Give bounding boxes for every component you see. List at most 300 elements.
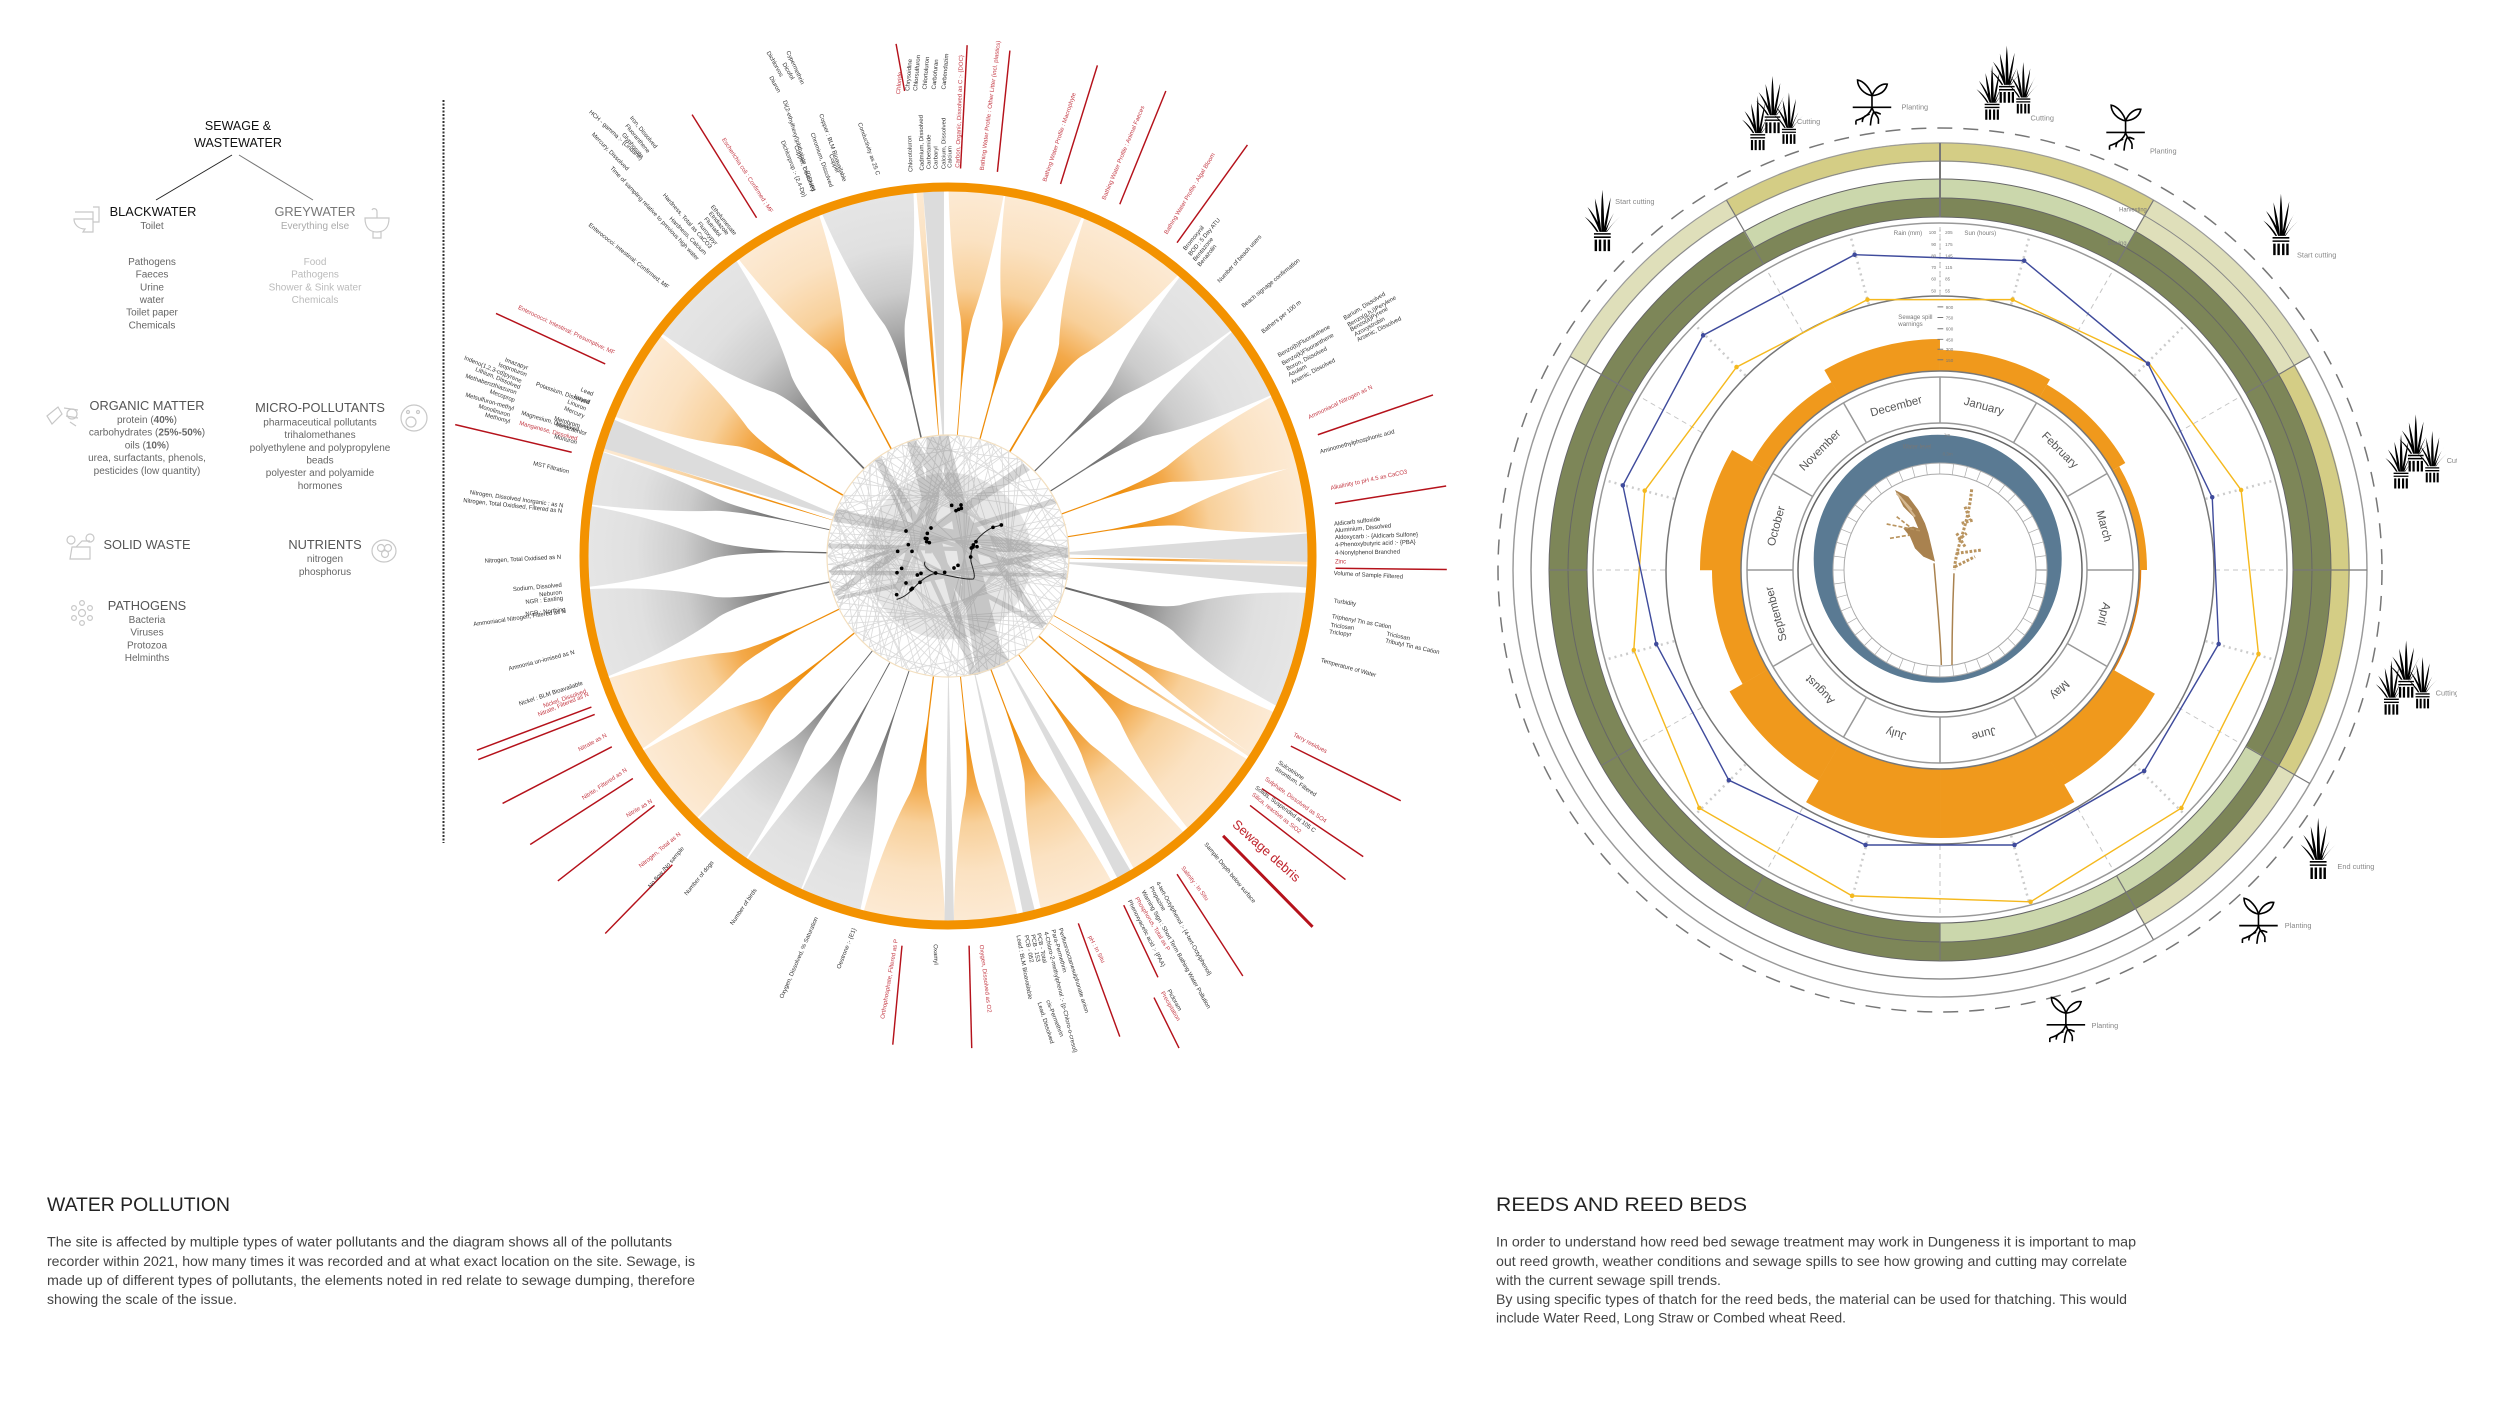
pollutant labels: Lithium, Dissolved: [474, 367, 521, 391]
rain line blue: [1621, 252, 2221, 847]
pollutant labels: Alkalinity to pH 4.5 as CaCO3: [1330, 469, 1409, 492]
micro-pollutants text: hormones: [298, 481, 342, 492]
pollutant labels: Metsulfuron-methyl: [465, 392, 514, 412]
greywater text: GREYWATER: [274, 204, 356, 219]
pollutant labels: Solids, Suspended at 105 C: [1254, 785, 1317, 835]
calendar action labels: Planting: [1902, 102, 1928, 111]
pollutant labels: Metobrom: [553, 416, 581, 430]
month labels: September: [1764, 585, 1790, 642]
pollutant labels: Chlorotoluron: [907, 135, 914, 172]
growing ring light green segments: [1419, 49, 2461, 1091]
pollutant labels: Glyphosate: [620, 132, 644, 160]
text block: water pollution: made up of different types of pollutants, the elements noted in red relate to sewage dumping, therefore: [47, 1272, 695, 1288]
calendar action labels: Planting: [2092, 1021, 2118, 1030]
pollutant labels: 4-Nonylphenol Branched: [1335, 550, 1400, 557]
pollutant labels: Calcium, Dissolved: [941, 118, 947, 169]
pollutant labels: Volume of Sample Filtered: [1334, 571, 1403, 581]
pollutant labels: Sample Depth below surface: [1203, 842, 1257, 905]
pollutant labels: Ammonia un-ionised as N: [508, 650, 575, 673]
pollutant labels: PCB - 153: [1029, 934, 1041, 963]
fans of recorded pollutants: [576, 178, 1321, 935]
pollutant labels: Bathers per 100 m: [1261, 300, 1303, 335]
pollutant labels: Chrysoidine: [905, 58, 914, 91]
chart: reed calendar radial diagram: [1369, 0, 2500, 1141]
axis labels: Rain (mm): [1894, 230, 1922, 237]
pollutant labels: Orthophosphate, Filtered as P: [880, 939, 900, 1019]
heading: sewage and wastewater: SEWAGE &: [205, 119, 272, 133]
axis labels: Sun (hours): [1964, 230, 1996, 237]
pollutant labels: Carbendazim: [941, 53, 950, 90]
pollutant labels: Number of beach users: [1217, 234, 1263, 284]
pollutant labels: Potassium, Dissolved: [535, 382, 590, 406]
pollutant labels: Arsenic, Dissolved: [1290, 358, 1336, 386]
pollutant labels: Calcium: [947, 146, 953, 168]
pollutant labels: Propazine: [1148, 886, 1166, 913]
axis labels: 50: [1931, 288, 1937, 293]
pollutant labels: Aluminium, Dissolved: [1335, 523, 1391, 534]
pollutant labels: Isoproturon: [497, 362, 527, 378]
pollutant labels: Nitrogen, Dissolved Inorganic : as N: [469, 490, 564, 510]
red sewage indicator lines: [455, 44, 1447, 1048]
pollutant labels: Nitrate as N: [578, 733, 608, 753]
dotted divider: [442, 100, 444, 843]
axis labels: 175: [1945, 242, 1953, 247]
pollutant labels: Benzo(b)Fluoranthene: [1277, 324, 1332, 359]
heading: sewage and wastewater: WASTEWATER: [194, 136, 282, 150]
text block: water pollution: showing the scale of the issue.: [47, 1291, 237, 1307]
greywater text: [269, 204, 362, 306]
pollutant labels: Copper : BLM Bioavailable: [817, 113, 847, 183]
pollutant labels: Copper: [827, 154, 840, 174]
pollutant labels: NGR : Northing: [525, 607, 566, 618]
calendar action labels: Cutting: [1797, 117, 1820, 126]
micro-pollutants text: MICRO-POLLUTANTS: [255, 400, 385, 415]
pollutant labels: Neburon: [539, 590, 562, 599]
pollutant labels: Arsenic, Dissolved: [1356, 316, 1403, 344]
month labels: May: [2047, 678, 2071, 702]
greywater text: Chemicals: [292, 295, 338, 306]
icon: pathogens: [72, 601, 92, 625]
calendar action labels: Cutting: [2436, 688, 2459, 698]
pollutant labels: Dichlorprop :- {2,4-Dp}: [779, 140, 807, 198]
axis labels: 750: [1946, 315, 1954, 320]
month labels: April: [2094, 601, 2112, 626]
organic matter text: pesticides (low quantity): [94, 466, 200, 477]
pollutant labels: Di(2-ethylhexyl)phthalate :- {DEHP}: [781, 100, 815, 192]
pollutant labels: Monolinuron: [478, 404, 511, 419]
pollutant labels: Oxygen, Dissolved as O2: [978, 944, 992, 1014]
blackwater text: Toilet: [140, 221, 164, 232]
pollutant labels: Aldoxycarb :- {Aldicarb Sulfone}: [1335, 532, 1418, 541]
pollutant labels: Nickel : BLM Bioavailable: [518, 681, 584, 708]
pollutant labels: 4-tert-Octylphenol :- {4-tert-Octylphenol}: [1154, 881, 1212, 977]
pollutant labels: Warning Sign : Short Term Bathing Water Pollution: [1140, 890, 1211, 1010]
calendar action labels: Planting: [2150, 146, 2177, 156]
micro-pollutants text: polyethylene and polypropylene: [250, 443, 391, 454]
pollutant labels: Triclopyr: [1329, 630, 1352, 638]
text block: water pollution: [47, 1195, 695, 1307]
month labels: July: [1885, 725, 1908, 742]
month labels: August: [1803, 672, 1837, 706]
pollutant labels: Chlortoluron: [922, 56, 931, 90]
nutrients text: phosphorus: [299, 567, 351, 578]
orange fans: sewage related: [593, 179, 1319, 935]
calendar action labels: Cutting: [2031, 113, 2054, 123]
calendar action labels: Start cutting: [1615, 197, 1655, 206]
pollutant labels: Mercury, Dissolved: [590, 132, 629, 172]
month labels: November: [1797, 427, 1844, 474]
pollutant labels: Turbidity: [1333, 599, 1356, 608]
pollutant labels: Chromium, Dissolved: [809, 132, 833, 188]
pollutant labels: Salinity : In Situ: [1179, 866, 1209, 902]
pollutant labels: Lead: [579, 387, 594, 398]
axis labels: 150: [1946, 358, 1954, 363]
pollutant labels: Nitrite, Filtered as N: [581, 768, 628, 802]
pollutant labels: Tarry residues: [1292, 732, 1328, 755]
month boundary guides: [1595, 225, 2285, 915]
pollutant labels: Temperature of Water: [1320, 658, 1377, 679]
pollutant labels: Bathing Water Profile : Algal Bloom: [1164, 152, 1217, 236]
panel: sewage and wastewater key: [47, 119, 427, 664]
blackwater text: Urine: [140, 282, 164, 294]
chart: water pollutant radial diagram: [455, 40, 1447, 1053]
month boundaries on rings: [1549, 143, 2367, 961]
icon: organic matter: [47, 407, 78, 426]
pathogens text: Protozoa: [127, 640, 167, 652]
pollutant labels: Mecoprop: [489, 389, 516, 404]
axis labels: 55: [1945, 288, 1951, 293]
heading: sewage and wastewater: [194, 119, 282, 150]
pollutant labels: Hardness, Calcium: [668, 216, 707, 257]
axis labels: 90: [1931, 242, 1937, 247]
pollutant labels: Benzo(a)Pyrene: [1349, 306, 1390, 333]
pollutant labels: Metazachlor: [555, 422, 587, 438]
pollutant labels: Flutriafol: [702, 216, 722, 238]
pollutant labels: Imazapyr: [504, 357, 529, 372]
month labels: March: [2093, 509, 2113, 543]
axis labels: Water level: [1903, 444, 1931, 450]
pollutant labels: Escherichia coli : Confirmed ; MF: [720, 137, 774, 215]
blackwater text: [110, 204, 196, 332]
pollutant labels: Enterococci: Intestinal; Presumptive; MF: [517, 305, 616, 356]
pollutant labels: Copper, Dissolved: [792, 145, 816, 193]
icon: solid waste: [67, 534, 94, 559]
pollutant labels: Number of birds: [730, 888, 759, 927]
centre scale axis: [1939, 230, 1942, 296]
pollutant labels: Carbaryl: [934, 146, 939, 169]
month labels: February: [2039, 430, 2080, 471]
pollutant labels: Enterococci: Intestinal; Confirmed; MF: [587, 223, 670, 291]
pollutant labels: Nitrite as N: [626, 799, 654, 819]
pollutant labels: No flow /No sample: [648, 846, 686, 890]
pollutant labels: Carbofuran: [932, 59, 940, 90]
pollutant labels: Nitrate, Filtered as N: [537, 692, 590, 718]
organic matter text: ORGANIC MATTER: [90, 398, 204, 413]
pollutant labels: Aminomethylphosphonic acid: [1319, 429, 1395, 456]
pathogens text: [108, 598, 186, 664]
blackwater text: Pathogens: [128, 257, 176, 268]
pollutant labels: Azoxystrobin: [1353, 316, 1386, 338]
pollutant labels: Triclosan: [1330, 623, 1354, 632]
branch lines: [156, 155, 313, 200]
pathogens text: Viruses: [130, 628, 164, 638]
text block: reeds and reed beds: By using specific types of thatch for the reed beds, the material can be used for thatching. This would: [1496, 1291, 2127, 1307]
pollutant labels: Zinc: [1335, 559, 1346, 566]
pollutant labels: Benazolin: [1197, 244, 1218, 268]
pollutant labels: cis-Permethrin: [1044, 999, 1064, 1038]
micro-pollutants text: pharmaceutical pollutants: [263, 418, 377, 428]
pollutant labels: Triclosan: [1386, 632, 1410, 642]
calendar action labels: Cutting: [2447, 456, 2470, 465]
greywater text: Pathogens: [291, 270, 339, 280]
month labels: December: [1869, 394, 1924, 419]
pollutant labels: Linuron: [566, 399, 587, 413]
pollutant labels: Nitrogen, Total as N: [638, 832, 682, 870]
pollutant labels: Bathing Water Profile : Animal Faeces: [1102, 105, 1146, 201]
pollutant labels: Ethofumesate: [709, 204, 737, 237]
axis labels: [1894, 208, 2147, 457]
organic matter text: protein (40%): [117, 415, 177, 426]
pollutant labels: Sodium, Dissolved: [513, 583, 562, 593]
pollutant labels: Etridiazole: [707, 211, 730, 237]
growing ring dark green: [1568, 198, 2312, 942]
pollutant labels: HCH - gamma :- {Lindane}: [587, 110, 643, 162]
pollutant labels: Oestrone :- {E1}: [836, 927, 858, 970]
pollutant labels: pH : In Situ: [1086, 935, 1105, 964]
dashed outer ring: [1498, 128, 2382, 1012]
pollutant labels: Cypermethrin: [784, 50, 805, 86]
axis labels: 60: [1931, 276, 1937, 281]
pollutant labels: Hardness, Total as CaCO3: [661, 193, 713, 251]
blackwater text: BLACKWATER: [110, 204, 196, 219]
pollutant labels: MST Filtration: [532, 461, 569, 476]
outer guide rings: [1513, 143, 2367, 997]
pollutant labels: Time of sampling relative to previous high water: [608, 166, 699, 262]
axis labels: 205: [1945, 230, 1953, 235]
axis labels: 70: [1931, 265, 1937, 270]
pollutant labels: Bromoxynil: [1183, 225, 1206, 252]
pollutant labels: Picloram: [1165, 989, 1182, 1012]
pollutant labels: Oxygen, Dissolved, % Saturation: [779, 916, 820, 1000]
pollutant labels: Fluroxypyr: [696, 221, 718, 247]
reed illustration: [1887, 489, 1982, 665]
tick ring: [1833, 463, 2047, 677]
pollutant labels: Tributyl Tin as Cation: [1385, 638, 1440, 656]
micro-pollutants text: trihalomethanes: [284, 430, 356, 441]
pollutant labels: Number of dogs: [684, 860, 715, 897]
pollutant labels: Silica, reactive as SiO2: [1250, 792, 1302, 836]
pollutant labels: Precipitation: [1159, 991, 1181, 1022]
pollutant labels: Nitrogen, Total Oxidised as N: [485, 555, 561, 565]
axis labels: 450: [1946, 337, 1954, 342]
organic matter text: carbohydrates (25%-50%): [89, 428, 205, 438]
calendar action labels: [1615, 102, 2470, 1030]
pollutant labels: Barium, Dissolved: [1343, 292, 1387, 322]
blackwater text: Toilet paper: [126, 308, 179, 318]
pollutant labels: Chlorsulfuron: [913, 55, 922, 91]
pollutant labels: Fluoranthene: [623, 123, 651, 155]
month centre guides: [1607, 237, 2273, 903]
calendar action labels: End cutting: [2337, 862, 2374, 871]
month labels: January: [1962, 396, 2005, 418]
pollutant labels: Sewage debris: [1230, 817, 1304, 885]
pollutant labels: Lead, Dissolved: [1036, 1002, 1054, 1045]
pollutant labels: Asulam: [1288, 364, 1308, 379]
pollutant labels: PCB - 052: [1022, 935, 1034, 964]
micro-pollutants text: beads: [306, 456, 334, 466]
text block: reeds and reed beds: REEDS AND REED BEDS: [1496, 1195, 1747, 1216]
calendar action labels: Start cutting: [2297, 250, 2336, 259]
central web of chords: [793, 399, 1105, 709]
ring edges: [1513, 143, 2367, 997]
text block: reeds and reed beds: In order to understand how reed bed sewage treatment may work in Dungeness it is important to map: [1496, 1234, 2136, 1250]
pollutant labels: Lead : BLM Bioavailable: [1015, 935, 1033, 1001]
month labels: June: [1970, 724, 1997, 742]
axis labels: Sowing: [2108, 241, 2127, 247]
blackwater text: water: [139, 295, 165, 306]
sun line yellow: [1632, 297, 2261, 904]
pollutant labels: Para-Permethrin: [1049, 929, 1067, 973]
pollutant labels: Nickel, Dissolved: [543, 689, 587, 710]
pollutant labels: 4-Chloro-2-methylphenol :- {p-Chloro-o-cresol}: [1042, 931, 1077, 1053]
pollutant labels: PCB - Total: [1035, 933, 1047, 964]
pollutant labels: Indeno(1,2,3-cd)pyrene: [463, 356, 523, 385]
text block: reeds and reed beds: [1495, 1195, 2136, 1326]
pollutant labels: Sulcotrione: [1277, 760, 1305, 782]
pollutant labels: Magnesium, Dissolved: [520, 411, 579, 433]
pollutant labels: Carbetamide: [926, 134, 932, 169]
pathogens text: Bacteria: [129, 615, 166, 626]
outer orange ring: [584, 187, 1312, 925]
nutrients text: [288, 537, 362, 578]
axis labels: 145: [1945, 253, 1953, 258]
organic matter text: [88, 398, 206, 477]
pollutant labels: Phosphorus, Total as P: [1133, 896, 1170, 952]
axis labels: 100: [1929, 230, 1937, 235]
pollutant labels: Beach signage confirmation: [1241, 258, 1301, 310]
axis labels: warnings: [1897, 321, 1923, 328]
greywater text: Food: [304, 257, 326, 268]
pollutant labels: Iron, Dissolved: [628, 115, 658, 150]
icons: planting: [1853, 80, 2278, 1043]
calendar action labels: Planting: [2285, 921, 2311, 930]
pollutant labels: Strontium, Filtered: [1273, 766, 1317, 798]
pollutant labels: Cadmium, Dissolved: [919, 115, 926, 171]
pollutant labels: Bathing Water Profile : Macrophyte: [1042, 91, 1078, 183]
pollutant labels: Chloride: [896, 71, 904, 95]
nutrients text: NUTRIENTS: [288, 537, 362, 552]
pollutant labels: Perfluorooctanesulphonate anion: [1057, 928, 1089, 1014]
pollutant labels: Monuron: [553, 434, 577, 446]
text block: water pollution: WATER POLLUTION: [47, 1195, 230, 1216]
text block: water pollution: recorder within 2021, how many times it was recorded and at what exact location on the site. Sewage, is: [47, 1253, 695, 1269]
text block: reeds and reed beds: with the current sewage spill trends.: [1495, 1272, 1721, 1288]
pollutant labels: Ammoniacal Nitrogen as N: [1308, 385, 1374, 421]
axis labels: 0.3m: [1943, 452, 1953, 457]
axis labels: Sewage spill: [1898, 314, 1932, 321]
month wheel: [1741, 371, 2139, 769]
month labels: October: [1766, 505, 1788, 548]
pollutant labels: Boron, Dissolved: [1286, 346, 1328, 373]
axis labels: 80: [1931, 253, 1937, 258]
pollutant labels: Mercury: [563, 406, 585, 420]
blackwater text: Faeces: [136, 270, 168, 280]
pollutant labels: Manganese, Dissolved: [519, 421, 578, 442]
icons: single bundle cutting: [1585, 190, 2336, 879]
axis labels: 115: [1945, 265, 1953, 270]
harvesting ring dark yellow segments: [1369, 0, 2500, 1141]
pollutant labels: Methabenzthiazuron: [464, 374, 517, 396]
pollutant labels: Benzo(g,h,i)Perylene: [1347, 295, 1398, 329]
icon: toilet: [74, 207, 99, 232]
text block: reeds and reed beds: out reed growth, weather conditions and sewage spills to see how growing and cutting may correlate: [1496, 1253, 2127, 1269]
axis labels: Harvesting: [2119, 208, 2147, 214]
blackwater text: Chemicals: [129, 320, 175, 332]
pollutant labels: [463, 40, 1440, 1053]
greywater text: Shower & Sink water: [269, 282, 362, 294]
weather ring bounds: [1593, 223, 2287, 917]
pollutant labels: Conductivity as 25 C: [856, 122, 880, 177]
pollutant labels: Methomyl: [484, 413, 511, 425]
inner ring: [827, 435, 1069, 677]
grey fans: other pollutants: [576, 178, 1321, 922]
sewage spill warnings bars: [1621, 251, 2259, 889]
pollutant labels: Oxamyl: [932, 944, 938, 965]
axis labels: 85: [1945, 276, 1951, 281]
pollutant labels: Ammoniacal Nitrogen, Filtered as N: [473, 609, 566, 628]
pollutant labels: 4-Phenoxybutyric acid :- {PBA}: [1335, 540, 1416, 549]
pollutant labels: Carbon, Organic, Dissolved as C :- {DOC}: [955, 55, 965, 168]
sewer line and sample points: [895, 503, 1003, 599]
greywater text: Everything else: [281, 221, 350, 232]
micro-pollutants text: polyester and polyamide: [266, 468, 375, 479]
nutrients text: nitrogen: [307, 554, 343, 565]
pollutant labels: Dicofol: [781, 62, 795, 81]
pollutant labels: Phenoxyacetic acid :- {PAA}: [1126, 899, 1166, 968]
pollutant labels: Sulphate, Dissolved as SO4: [1263, 777, 1328, 825]
micro-pollutants text: [250, 400, 391, 492]
right edge crop: [2457, 0, 2500, 1100]
pollutant labels: Diuron: [767, 76, 781, 94]
pollutant labels: Dichlorvos: [765, 51, 784, 78]
icon: nutrients: [372, 540, 396, 562]
text block: water pollution: The site is affected by multiple types of water pollutants and the diagram shows all of the pollutants: [47, 1234, 672, 1250]
organic matter text: urea, surfactants, phenols,: [88, 453, 206, 464]
organic matter text: oils (10%): [125, 440, 169, 452]
icon: micro-pollutants: [401, 405, 427, 431]
pollutant labels: Bentazone: [1192, 236, 1216, 263]
rain and sun lines: [1585, 46, 2470, 1043]
grey strips: [594, 180, 1319, 932]
pollutant labels: Aldicarb sulfoxide: [1334, 517, 1381, 528]
axis labels: 1m: [1944, 432, 1950, 437]
axis labels: 600: [1946, 327, 1954, 332]
axis labels: 900: [1946, 305, 1954, 310]
pathogens text: Helminths: [125, 653, 169, 664]
pollutant labels: Nitrogen, Total Oxidised, Filtered as N: [463, 498, 562, 515]
axis labels: 300: [1946, 347, 1954, 352]
pathogens text: PATHOGENS: [108, 598, 186, 613]
water level crescent: [1814, 435, 2062, 683]
pollutant labels: BOD : 5 Day ATU: [1188, 218, 1222, 257]
icons: three-bundle cutting: [1742, 46, 2447, 715]
pollutant labels: Bathing Water Profile : Other Litter (incl. plastics): [980, 40, 1002, 171]
pollutant labels: Triphenyl Tin as Cation: [1331, 614, 1392, 631]
solid waste text: SOLID WASTE: [104, 537, 190, 552]
pollutant labels: Ioxynil: [573, 394, 591, 406]
pollutant labels: NGR : Easting: [525, 596, 563, 606]
icon: sink: [365, 209, 389, 238]
